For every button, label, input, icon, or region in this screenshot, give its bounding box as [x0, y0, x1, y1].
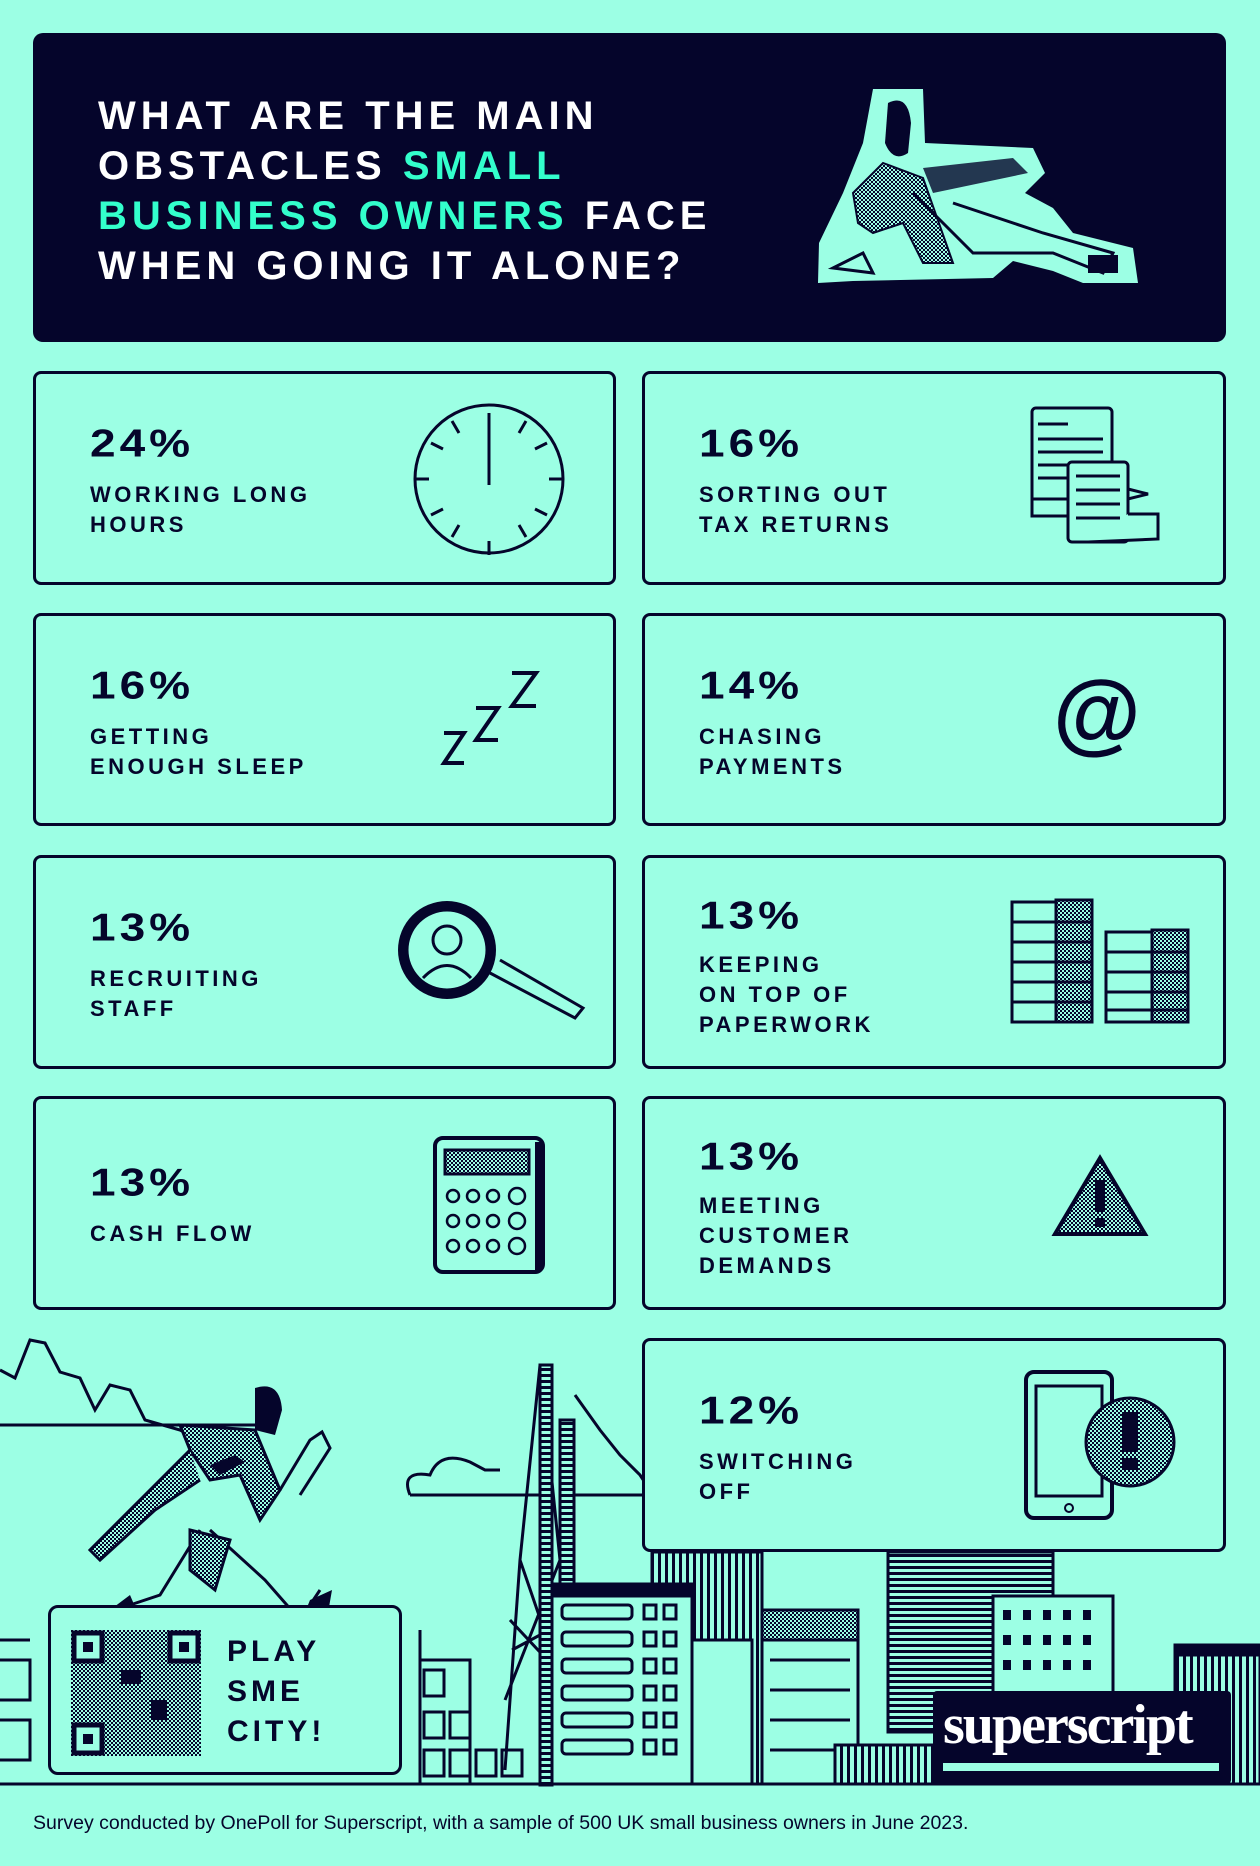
card: customer demands: MEETING [699, 1193, 824, 1218]
card: chasing payments: CHASING [699, 724, 825, 749]
icon: phone alert [1024, 1370, 1176, 1520]
title: OBSTACLES SMALL [98, 144, 566, 188]
card: recruiting [33, 855, 616, 1069]
icon: magnifier [398, 901, 586, 1020]
play text [227, 1635, 325, 1748]
card: paperwork [642, 855, 1226, 1069]
title: BUSINESS OWNERS FACE [98, 194, 711, 238]
card: customer demands: CUSTOMER [699, 1223, 852, 1248]
title [98, 94, 711, 288]
play text: SME [227, 1675, 304, 1708]
card: working long hours: HOURS [90, 512, 187, 537]
QR panel [48, 1605, 402, 1775]
illustration: man falling [818, 89, 1138, 283]
card: chasing payments: PAYMENTS [699, 754, 846, 779]
card: paperwork: PAPERWORK [699, 1012, 874, 1037]
card: chasing payments [642, 613, 1226, 826]
QR code [71, 1630, 201, 1756]
card: cash flow [33, 1096, 616, 1310]
play text: CITY! [227, 1715, 325, 1748]
card: sleep: 16% [90, 663, 194, 707]
icon: paper stacks [1010, 898, 1190, 1024]
icon: documents [1030, 406, 1160, 544]
card: tax returns: 16% [699, 421, 803, 465]
title: WHEN GOING IT ALONE? [98, 244, 685, 288]
card: chasing payments: 14% [699, 663, 803, 707]
logo: superscript: superscript [943, 1694, 1192, 1756]
card: recruiting: 13% [90, 905, 194, 949]
card: working long hours: 24% [90, 421, 194, 465]
card: sleep: GETTING [90, 724, 212, 749]
play text: PLAY [227, 1635, 320, 1668]
card: customer demands: 13% [699, 1134, 803, 1178]
footer note: Survey conducted by OnePoll for Superscript, with a sample of 500 UK small business owners in June 2023. [33, 1812, 968, 1834]
card: tax returns [642, 371, 1226, 585]
card: paperwork: ON TOP OF [699, 982, 851, 1007]
card: sleep [33, 613, 616, 826]
runner illustration [88, 1386, 332, 1605]
card: paperwork: KEEPING [699, 952, 823, 977]
icon: warning [1052, 1154, 1148, 1236]
icon: zzz [440, 671, 540, 765]
logo: superscript [933, 1691, 1231, 1784]
icon: clock [414, 404, 564, 555]
card: sleep: ENOUGH SLEEP [90, 754, 307, 779]
card: switching off: OFF [699, 1479, 754, 1504]
card: switching off: SWITCHING [699, 1449, 856, 1474]
icon: calculator [433, 1136, 545, 1274]
card: tax returns: SORTING OUT [699, 482, 890, 507]
card: cash flow: CASH FLOW [90, 1221, 255, 1246]
card: customer demands: DEMANDS [699, 1253, 835, 1278]
card: tax returns: TAX RETURNS [699, 512, 892, 537]
card: paperwork: 13% [699, 893, 803, 937]
card: customer demands [642, 1096, 1226, 1310]
card: working long hours: WORKING LONG [90, 482, 310, 507]
icon: at sign: @ [1053, 663, 1141, 763]
card: switching off [642, 1338, 1226, 1552]
card: cash flow: 13% [90, 1160, 194, 1204]
card: recruiting: RECRUITING [90, 966, 262, 991]
card: switching off: 12% [699, 1388, 803, 1432]
title: WHAT ARE THE MAIN [98, 94, 599, 138]
card: recruiting: STAFF [90, 996, 177, 1021]
card: working long hours [33, 371, 616, 585]
header panel [33, 33, 1226, 342]
